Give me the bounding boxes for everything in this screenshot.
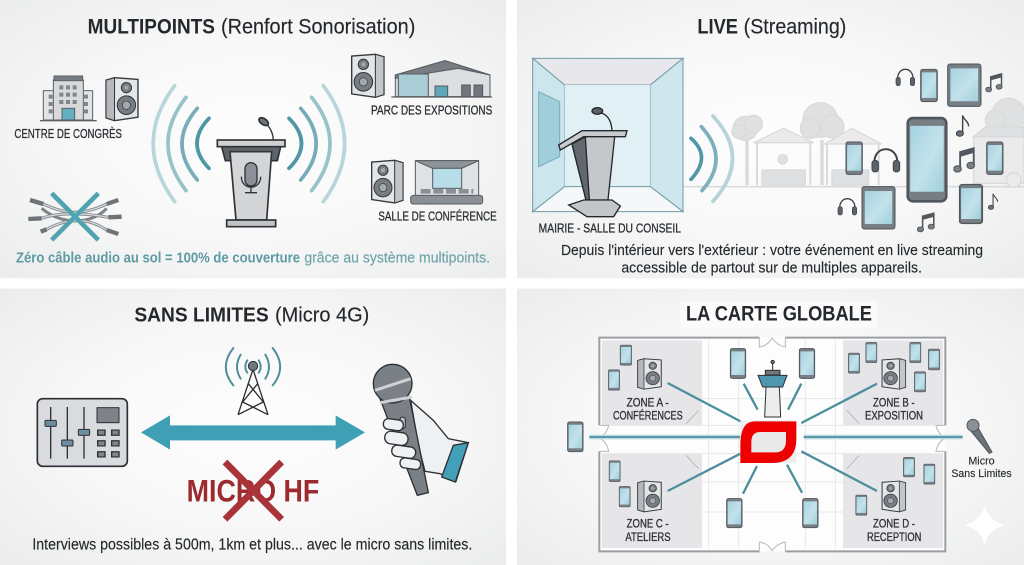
icons: phones (568, 342, 940, 528)
zone B area (843, 340, 943, 425)
icon: crossed out audio cables (28, 193, 122, 240)
caption: live streaming (561, 242, 983, 277)
label: zone D (867, 517, 921, 544)
title: sans limites (134, 305, 369, 327)
icon: hand holding microphone (373, 364, 468, 495)
label: parc des expositions: PARC DES EXPOSITIONS (371, 103, 493, 118)
caption: interviews: Interviews possibles à 500m, 1km et plus... avec le micro sans limites. (32, 537, 472, 554)
zone C area (602, 454, 702, 548)
caption: zero cable (16, 251, 490, 267)
label: zone C (625, 517, 671, 544)
icon: speaker, parc des expositions (352, 54, 384, 97)
connection lines (589, 383, 963, 494)
zone A area (602, 340, 702, 425)
label: micro sans limites (951, 456, 1012, 480)
caption: zero cable: Zéro câble audio au sol = 100% de couverture (16, 251, 300, 267)
caption: live streaming: Depuis l'intérieur vers l'extérieur : votre événement en live streaming (561, 242, 983, 259)
title: live: (Streaming) (744, 16, 846, 39)
label: zone C: ZONE C - (627, 517, 669, 531)
crossed out label: micro HF: MICRO HF (187, 472, 319, 508)
label: salle de conférence: SALLE DE CONFÉRENCE (378, 209, 497, 224)
icons: mobile devices (846, 64, 1003, 229)
icon: congress centre building (40, 76, 97, 121)
icon: lectern with microphone (217, 116, 285, 227)
label: zone B: EXPOSITION (865, 409, 923, 423)
logo: red rounded shape (740, 420, 796, 463)
label: zone C: ATELIERS (625, 530, 671, 544)
icon: speaker, salle de conférence (372, 160, 403, 203)
label: zone B (865, 395, 923, 423)
label: micro sans limites: Sans Limites (951, 468, 1012, 480)
panel: multipoints (0, 0, 506, 278)
title: la carte globale: LA CARTE GLOBALE (686, 302, 872, 326)
icons: headphones (838, 69, 915, 215)
icon: mixing console (37, 399, 127, 466)
icon: wireless microphone (967, 419, 992, 453)
icons: music notes (917, 74, 1002, 232)
label: zone D: RECEPTION (867, 530, 921, 544)
title: sans limites: (Micro 4G) (275, 305, 369, 327)
title: live: LIVE (697, 16, 738, 39)
icon: white sparkle (965, 505, 1005, 545)
icon: exhibition hall building (391, 61, 492, 97)
icon: conference room (411, 161, 483, 204)
label: mairie: MAIRIE - SALLE DU CONSEIL (539, 221, 681, 236)
caption: zero cable: grâce au système multipoints. (304, 251, 490, 267)
icon: broadcast sound waves (691, 116, 732, 201)
title: multipoints: MULTIPOINTS (88, 16, 215, 39)
icon: speaker, congress centre (106, 78, 138, 121)
label: zone A (613, 395, 683, 423)
floor plan (599, 338, 945, 551)
panel: la carte globale (517, 289, 1024, 565)
panel: sans limites (0, 289, 506, 565)
icon: 4G tower (226, 348, 280, 415)
title: live (697, 16, 846, 39)
label: zone B: ZONE B - (873, 395, 915, 409)
label: zone A: CONFÉRENCES (613, 408, 683, 423)
title: sans limites: SANS LIMITES (134, 305, 269, 327)
icons: speakers (638, 359, 906, 512)
arrow: two-way link (141, 415, 365, 450)
label: centre de congrès: CENTRE DE CONGRÈS (14, 126, 122, 141)
icon: right sound waves (289, 86, 345, 202)
label: micro sans limites: Micro (968, 456, 995, 468)
icon: left sound waves (153, 86, 209, 202)
panel: live streaming (517, 0, 1024, 278)
label: zone A: ZONE A - (627, 395, 669, 409)
outdoor scene: trees, tents and market (684, 98, 1024, 187)
crossed out label: micro HF (187, 462, 319, 519)
title: multipoints: (Renfort Sonorisation) (221, 16, 415, 39)
icon: control tower (758, 360, 787, 417)
zone D area (843, 454, 943, 548)
title: multipoints (88, 16, 415, 39)
illustration: council chamber with lectern (533, 58, 683, 217)
caption: live streaming: accessible de partout sur de multiples appareils. (621, 260, 922, 277)
label: zone D: ZONE D - (873, 517, 915, 531)
